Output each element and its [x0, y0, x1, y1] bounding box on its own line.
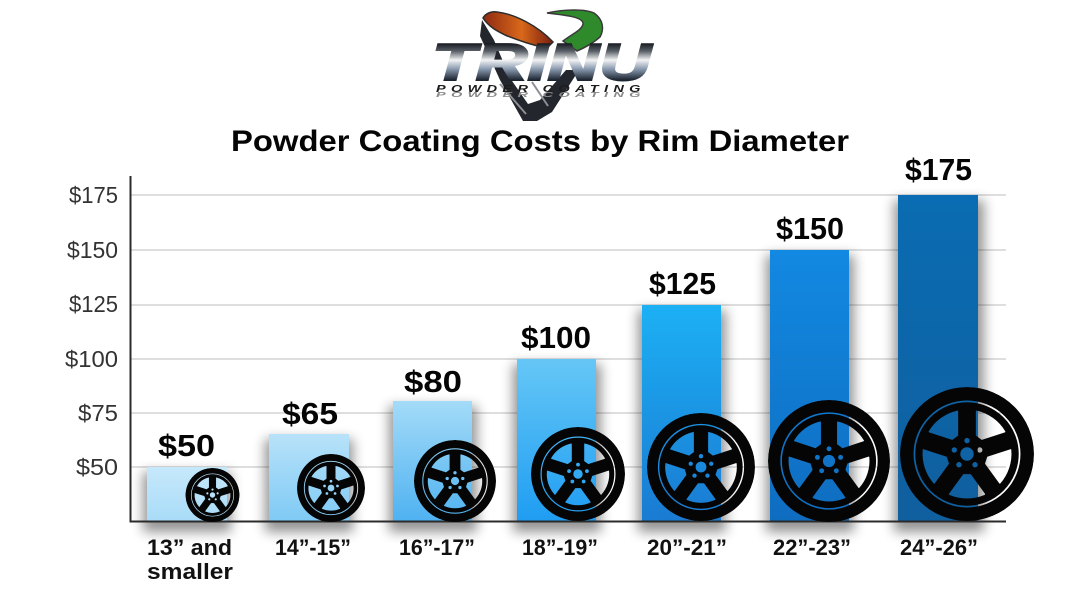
gridlines	[130, 195, 1006, 467]
category labels: smaller	[147, 559, 233, 584]
chart: powder coating cost by rim diameter	[65, 152, 1034, 584]
category labels: 22”-23”	[773, 535, 851, 560]
value labels	[158, 152, 972, 463]
axes	[130, 176, 1006, 522]
category labels: 16”-17”	[399, 535, 475, 560]
title: Powder Coating Costs by Rim Diameter	[231, 125, 849, 158]
y axis labels	[65, 182, 118, 480]
logo swoosh red	[483, 12, 553, 48]
category labels: 14”-15”	[275, 535, 351, 560]
value labels: $65	[282, 396, 338, 431]
logo chevron	[480, 20, 579, 121]
value labels: $150	[776, 211, 844, 246]
y axis labels: $125	[69, 291, 118, 317]
category labels: 18”-19”	[522, 535, 598, 560]
y axis labels: $175	[69, 182, 118, 208]
bars	[147, 195, 978, 521]
wheels	[186, 387, 1034, 522]
y axis labels: $150	[67, 237, 118, 263]
y axis labels: $100	[65, 346, 118, 372]
category labels	[147, 535, 978, 584]
bar shadows	[143, 200, 984, 532]
category labels: 20”-21”	[647, 535, 727, 560]
category labels: 13” and	[147, 535, 232, 560]
logo swoosh green	[547, 10, 602, 51]
logo wordmark: TRINU	[432, 34, 653, 92]
value labels: $50	[158, 428, 215, 463]
value labels: $100	[521, 320, 591, 355]
y axis labels: $50	[76, 454, 118, 480]
value labels: $125	[649, 266, 716, 301]
y axis labels: $75	[78, 400, 118, 426]
logo subtitle: POWDER COATING	[436, 83, 641, 94]
value labels: $80	[404, 364, 462, 399]
category labels: 24”-26”	[900, 535, 978, 560]
logo: Trinu Powder Coating: POWDER COATING	[436, 91, 641, 99]
logo: Trinu Powder Coating	[432, 10, 653, 121]
value labels: $175	[905, 152, 972, 187]
